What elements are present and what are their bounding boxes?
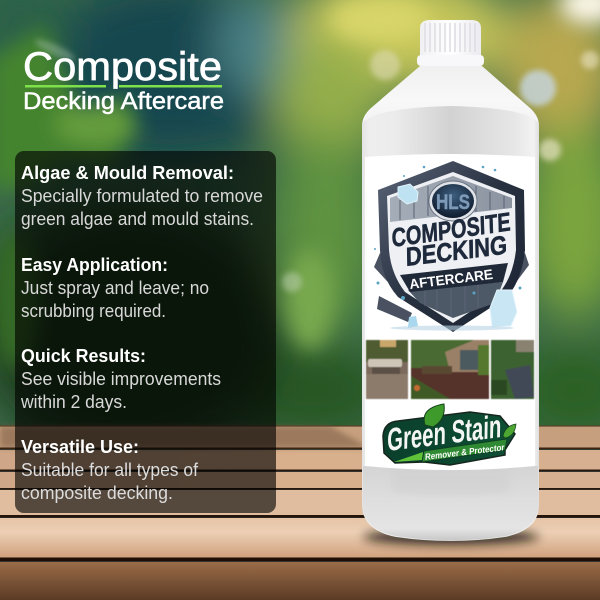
title: Composite — [23, 45, 222, 89]
benefit: easy application — [21, 255, 209, 321]
photo: garden path — [491, 340, 534, 399]
title underline right — [119, 85, 222, 88]
logo name: Green Stain — [387, 408, 502, 458]
title: Decking Aftercare — [23, 88, 224, 115]
logo leaf — [424, 404, 444, 427]
logo tagline: Remover & Protector — [425, 442, 505, 462]
bottle — [362, 20, 539, 541]
bottle lower band — [363, 466, 538, 540]
shield banner — [400, 263, 508, 292]
bottle shoulder — [362, 66, 539, 135]
panel: benefits — [15, 151, 276, 513]
benefit: algae and mould removal — [21, 163, 263, 229]
bottle shadow — [363, 529, 539, 545]
shield siding bottom — [408, 282, 503, 318]
benefit: versatile use — [21, 437, 199, 503]
photo: patio with sofa — [366, 340, 408, 399]
water pool — [390, 326, 514, 330]
logo banner — [422, 439, 507, 462]
benefit: versatile use: Versatile Use: — [21, 437, 139, 457]
shield siding top — [390, 176, 512, 222]
benefit: quick results — [20, 346, 221, 412]
benefit: quick results: Quick Results: — [21, 346, 146, 366]
benefit: algae and mould removal: Algae & Mould Removal: — [21, 163, 234, 183]
bottle body — [362, 106, 539, 541]
logo: composite decking shield: AFTERCARE — [408, 266, 494, 292]
shield outer — [378, 161, 525, 332]
logo: composite decking shield: DECKING — [406, 230, 507, 272]
benefit: algae and mould removal: green algae and mould stains. — [21, 209, 254, 229]
wooden deck — [0, 425, 600, 600]
background: blurred garden foliage — [0, 0, 600, 460]
logo small leaf — [503, 424, 516, 438]
benefit: easy application: scrubbing required. — [21, 301, 166, 321]
ice crystal bottom — [408, 316, 418, 328]
photo: deck and house — [411, 340, 489, 399]
benefit: versatile use: composite decking. — [21, 483, 173, 503]
benefit: quick results: within 2 days. — [20, 392, 127, 412]
benefit: easy application: Just spray and leave; no — [21, 278, 209, 298]
benefit: quick results: See visible improvements — [21, 369, 221, 389]
bottle cap — [417, 20, 484, 66]
title underline left — [25, 85, 106, 88]
decking boards behind shield — [374, 253, 529, 322]
benefit: algae and mould removal: Specially formulated to remove — [21, 186, 263, 206]
HLS badge — [429, 181, 477, 221]
benefit: easy application: Easy Application: — [21, 255, 168, 275]
water droplets — [374, 166, 522, 300]
ice crystal top left — [398, 184, 418, 204]
ice crystal bottom right — [490, 290, 517, 327]
benefit: versatile use: Suitable for all types of — [21, 460, 199, 480]
title — [23, 45, 224, 115]
logo swoosh — [394, 452, 423, 462]
logo badge — [383, 412, 515, 465]
logo: composite decking shield — [374, 161, 529, 332]
product label — [365, 154, 535, 470]
shield text: COMPOSITE — [391, 206, 511, 253]
HLS badge: HLS — [436, 191, 470, 214]
logo: Green Stain — [383, 404, 516, 465]
